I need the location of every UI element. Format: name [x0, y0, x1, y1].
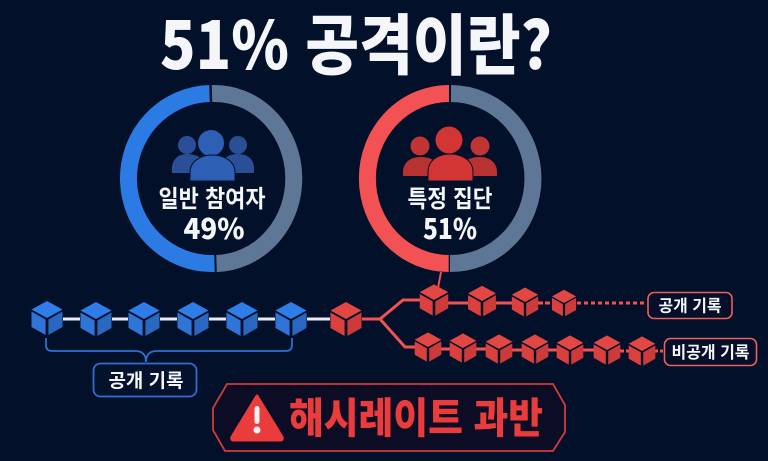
icon: blue people group	[172, 130, 254, 181]
lower branch blocks	[415, 332, 655, 366]
icon: warning triangle	[232, 396, 282, 440]
label: private record: 비공개 기록	[672, 339, 750, 363]
upper branch links	[448, 302, 644, 304]
ring segment: 51% red	[367, 93, 449, 263]
panel: general participants ring	[128, 93, 294, 264]
ring segment: grey remainder	[212, 93, 294, 263]
icon: red people group	[403, 126, 497, 181]
blue public chain blocks	[32, 301, 306, 336]
callout text: 해시레이트 과반	[289, 385, 543, 446]
label: upper public record: 공개 기록	[658, 292, 722, 316]
upper branch blocks	[420, 284, 576, 316]
value: 51%: 51%	[423, 208, 477, 248]
red fork block	[330, 302, 362, 336]
lower branch links	[440, 349, 664, 351]
value: 49%: 49%	[184, 208, 244, 248]
panel: specific group ring	[367, 93, 533, 288]
label: public record: 공개 기록	[108, 366, 184, 393]
bracket: public blocks	[46, 338, 292, 362]
main chain links	[63, 318, 330, 320]
label: specific group: 특정 집단	[408, 179, 492, 214]
label: general participants: 일반 참여자	[158, 179, 266, 214]
callout: hashrate majority	[213, 384, 565, 451]
ring segment: grey remainder	[450, 94, 533, 264]
ring segment: 49% blue	[128, 94, 214, 264]
label: public record	[94, 364, 196, 396]
connector: ring to fork	[438, 272, 441, 288]
fork lines	[362, 300, 420, 347]
